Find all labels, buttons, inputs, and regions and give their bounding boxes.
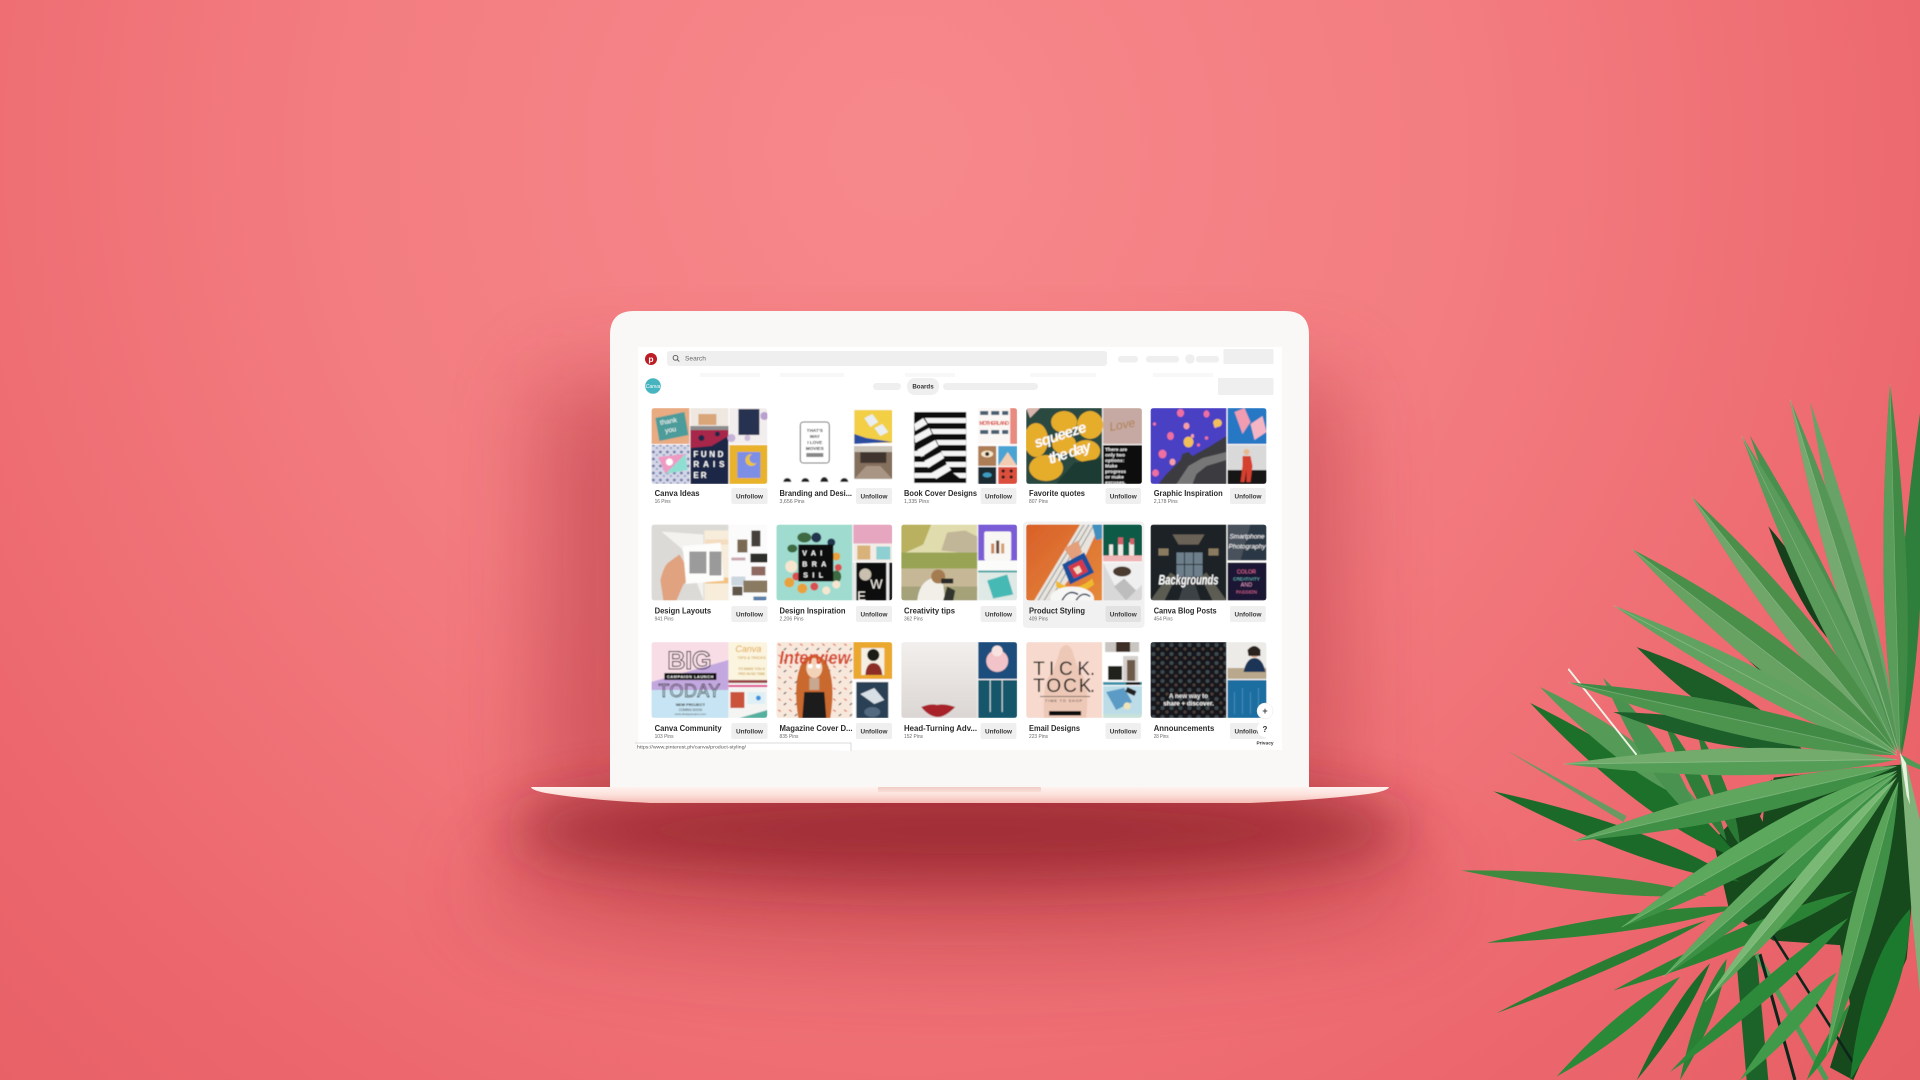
pin count: 152 Pins [904, 734, 923, 740]
thumbnail: favorite quotes collage: excuses. [1105, 481, 1126, 486]
thumbnail: design inspiration collage: W [870, 576, 883, 592]
thumbnail: canva community collage: TODAY [658, 681, 720, 701]
thumbnail: announcements collage [1150, 642, 1266, 718]
front leaves [1563, 748, 1920, 1002]
thumbnail: branding collage: THAT'S [807, 428, 823, 433]
thumbnail: email designs collage: T I C K. [1033, 659, 1095, 680]
search bar: Search [685, 356, 706, 363]
unfollow button: Unfollow [861, 493, 888, 500]
card: Book Cover Designs [901, 408, 1017, 505]
floating help button [1257, 721, 1273, 737]
pin count: 16 Pins [655, 499, 671, 505]
status bar url [635, 743, 851, 751]
thumbnail: design inspiration collage [776, 524, 892, 604]
thumbnail: canva community collage: CAMPAIGN LAUNCH [667, 674, 714, 679]
thumbnail: favorite quotes collage: progress [1105, 469, 1126, 475]
thumbnail: favorite quotes collage: only two [1105, 452, 1125, 458]
pin count: 454 Pins [1154, 616, 1173, 622]
board title: Magazine Cover D... [780, 723, 852, 733]
thumbnail: design layouts collage [651, 524, 767, 600]
card: Announcements [1150, 642, 1266, 740]
unfollow button: Unfollow [736, 611, 763, 618]
icon: pinterest logo [645, 353, 657, 365]
thumbnail: branding collage: WAY [810, 434, 820, 439]
base notch [878, 787, 1041, 792]
thumbnail: email designs collage [1026, 642, 1142, 718]
thumbnail: canva community collage: Canva [735, 644, 761, 654]
unfollow button: Unfollow [985, 611, 1012, 618]
thumbnail: favorite quotes collage: There are [1105, 447, 1127, 453]
floating help button: ? [1263, 725, 1268, 734]
card: Canva Blog Posts [1150, 524, 1266, 622]
thumbnail: canva blog posts collage: AND [1241, 582, 1252, 588]
thumbnail: product styling collage [1026, 524, 1142, 600]
thumbnail: email designs collage: T O C K. [1033, 676, 1095, 697]
unfollow button: Unfollow [1110, 493, 1137, 500]
card: Creativity tips [901, 524, 1017, 622]
profile tabs [873, 378, 1274, 395]
thumbnail: branding collage: MOVIES [806, 446, 824, 451]
pin count: 362 Pins [904, 616, 923, 622]
privacy link: Privacy [1256, 740, 1274, 746]
board title: Book Cover Designs [904, 488, 977, 498]
thumbnail: favorite quotes collage [1024, 408, 1142, 486]
thumbnail: head-turning collage [901, 642, 1017, 718]
thumbnail: canva blog posts collage: Smartphone [1230, 534, 1265, 540]
thumbnail: design inspiration collage: SIL [803, 572, 827, 580]
thumbnail: canva ideas collage: thank [660, 417, 678, 427]
thumbnail: favorite quotes collage: Love [1108, 416, 1137, 434]
status bar url: https://www.pinterest.ph/canva/product-styling/ [637, 744, 747, 750]
board title: Email Designs [1029, 723, 1080, 733]
thumbnail: canva blog posts collage: Backgrounds [1158, 572, 1219, 588]
board title: Graphic Inspiration [1154, 488, 1223, 498]
board title: Product Styling [1029, 606, 1085, 616]
card: Email Designs [1026, 642, 1142, 740]
card: Graphic Inspiration [1150, 408, 1266, 505]
pin count: 28 Pins [1154, 734, 1169, 740]
lower stalks [1757, 936, 1853, 1080]
thumbnail: canva ideas collage: FUND [693, 450, 726, 459]
laptop lid [610, 311, 1309, 787]
thumbnail: canva blog posts collage: COLOR [1237, 570, 1256, 576]
floating plus button [1257, 703, 1273, 719]
unfollow button: Unfollow [736, 493, 763, 500]
unfollow button: Unfollow [861, 728, 888, 735]
hover highlight: product styling card [1023, 522, 1144, 628]
pin count: 409 Pins [1029, 616, 1048, 622]
board title: Canva Community [655, 723, 722, 733]
board title: Favorite quotes [1029, 488, 1085, 498]
board title: Design Layouts [655, 606, 711, 616]
gaps between leaves [1760, 774, 1831, 846]
unfollow button: Unfollow [1235, 728, 1262, 735]
plant: palm leaves [1462, 384, 1920, 1080]
dark leaf mass [1713, 764, 1915, 1080]
unfollow button: Unfollow [1110, 611, 1137, 618]
pin count: 103 Pins [655, 734, 674, 740]
card: Product Styling [1026, 524, 1142, 622]
unfollow button: Unfollow [736, 728, 763, 735]
thumbnail: canva community collage: BIG [667, 647, 711, 675]
thumbnail: canva community collage: TIPS & TRICKS [737, 655, 766, 660]
pin count: 941 Pins [655, 616, 674, 622]
card: Magazine Cover Design [776, 642, 892, 740]
header navigation placeholders [1118, 349, 1274, 364]
pin count: 2,178 Pins [1154, 499, 1178, 505]
thumbnail: graphic inspiration collage [1150, 408, 1266, 484]
thumbnail: canva community collage: PRO IN NO TIME [738, 672, 766, 676]
icon: canva avatar [645, 378, 661, 394]
unfollow button: Unfollow [985, 728, 1012, 735]
floating plus button: + [1262, 706, 1268, 716]
thumbnail: canva community collage: NEW PROJECT [676, 702, 706, 707]
thumbnail: canva community collage: TO MAKE YOU A [738, 667, 766, 671]
screen [635, 347, 1282, 751]
thumbnail: canva blog posts collage: CREATIVITY [1233, 576, 1260, 582]
thumbnail: favorite quotes collage: Make [1105, 464, 1118, 470]
thumbnail: favorite quotes collage: squeeze [1032, 419, 1089, 452]
laptop base [531, 787, 1389, 803]
thumbnail: branding collage: I LOVE [807, 440, 822, 445]
thumbnail: canva ideas collage: ER [693, 471, 709, 480]
thumbnail: email designs collage: TIME TO SHOP [1045, 699, 1083, 703]
card: Design Inspiration [776, 524, 892, 622]
thumbnail: design inspiration collage: BRA [802, 562, 831, 568]
thumbnail: canva ideas collage [651, 408, 768, 484]
thumbnail: canva community collage: www.designproject.com [675, 712, 707, 716]
pin count: 835 Pins [780, 734, 799, 740]
thumbnail: canva ideas collage: RAIS [693, 460, 729, 469]
pin count: 3,656 Pins [780, 499, 805, 505]
thumbnail: branding collage [776, 408, 892, 484]
thumbnail: design inspiration collage: E [857, 588, 866, 604]
thumbnail: canva ideas collage: you [665, 426, 677, 435]
board title: Head-Turning Adv... [904, 723, 977, 733]
lower leaves [1613, 782, 1910, 1080]
card: Branding and Design [776, 408, 892, 505]
profile tabs: Boards [912, 384, 934, 391]
card: Canva Ideas [651, 408, 768, 505]
unfollow button: Unfollow [985, 493, 1012, 500]
pin count: 1,335 Pins [904, 499, 929, 505]
thumbnail: favorite quotes collage: options: [1105, 458, 1125, 464]
board title: Branding and Desi... [780, 488, 852, 498]
thumbnail: announcements collage: share + discover. [1163, 700, 1214, 708]
thumbnail: canva community collage: COMING SOON [679, 708, 703, 712]
thumbnail: magazine cover collage: Interview [779, 648, 851, 668]
unfollow button: Unfollow [1110, 728, 1137, 735]
thumbnail: favorite quotes collage: or make [1105, 474, 1124, 480]
board title: Canva Ideas [655, 488, 700, 498]
back leaves [1462, 526, 1840, 1080]
thumbnail: book cover collage: MOTHERLAND [979, 421, 1009, 427]
laptop shadow on wall [480, 380, 1440, 955]
card: Canva Community [651, 642, 768, 740]
thumbnail: canva blog posts collage: PASSION [1236, 590, 1258, 596]
card: Design Layouts [651, 524, 768, 622]
thumbnail: design inspiration collage: VAI [802, 550, 827, 558]
icon: pinterest logo: p [648, 354, 654, 364]
thumbnail: announcements collage: A new way to [1169, 693, 1208, 700]
thumbnail: favorite quotes collage: the day [1046, 438, 1094, 468]
upper leaves [1568, 384, 1920, 755]
card: Favorite quotes [1024, 408, 1142, 505]
laptop [531, 311, 1389, 803]
thumbnail: canva blog posts collage [1150, 524, 1266, 600]
board title: Creativity tips [904, 606, 955, 616]
icon: canva avatar: Canva [646, 384, 660, 390]
pin count: 223 Pins [1029, 734, 1048, 740]
card: Head-Turning Advertising [901, 642, 1017, 740]
leaf ribs [1563, 384, 1900, 1054]
board title: Canva Blog Posts [1154, 606, 1217, 616]
search bar [667, 351, 1107, 366]
unfollow button: Unfollow [1235, 611, 1262, 618]
unfollow button: Unfollow [1235, 493, 1262, 500]
unfollow button: Unfollow [861, 611, 888, 618]
board title: Design Inspiration [780, 606, 846, 616]
pin count: 807 Pins [1029, 499, 1048, 505]
thumbnail: creativity tips collage [901, 524, 1017, 600]
board title: Announcements [1154, 723, 1214, 733]
thumbnail: canva blog posts collage: Photography [1228, 544, 1266, 550]
thumbnail: canva community collage [651, 642, 767, 718]
pin count: 2,206 Pins [780, 616, 804, 622]
